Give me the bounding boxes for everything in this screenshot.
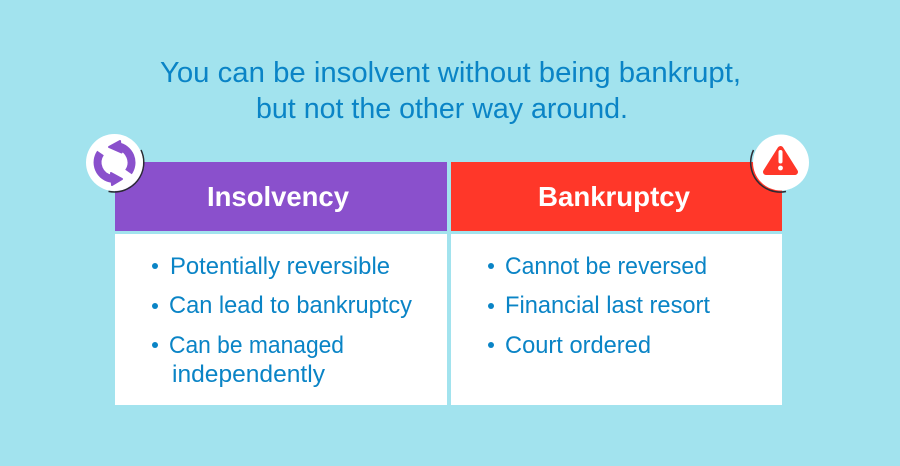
insolvency header (115, 162, 447, 231)
icon: reverse arrows (86, 134, 144, 192)
insolvency list: independently (172, 361, 325, 388)
insolvency header: Insolvency (207, 181, 350, 212)
insolvency list (115, 234, 447, 405)
bankruptcy header: Bankruptcy (538, 181, 691, 212)
bankruptcy list (451, 234, 782, 405)
bankruptcy list: Financial last resort (505, 292, 710, 319)
panel: bankruptcy (451, 162, 782, 405)
bankruptcy list: Cannot be reversed (505, 253, 707, 280)
title: but not the other way around. (256, 93, 628, 125)
icon: warning triangle (751, 134, 809, 192)
insolvency list: Potentially reversible (170, 253, 390, 280)
bankruptcy header (451, 162, 782, 231)
bankruptcy list: Court ordered (505, 332, 651, 359)
title: You can be insolvent without being bankrupt, (160, 57, 741, 89)
panel: insolvency (115, 162, 447, 405)
insolvency list: Can be managed (169, 332, 344, 359)
insolvency list: Can lead to bankruptcy (169, 292, 412, 319)
title (160, 57, 741, 125)
